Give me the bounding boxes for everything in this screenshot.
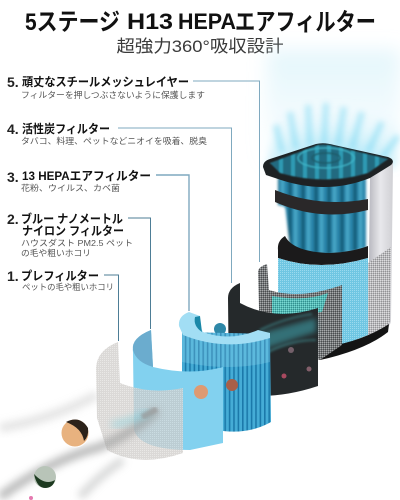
title: エアフィルター xyxy=(235,9,376,36)
label 4: activated carbon filter: タバコ、料理、ペットなどニオイを吸着、脱臭 xyxy=(21,136,208,146)
inner teal wall xyxy=(195,316,202,332)
label 1: pre-filter xyxy=(7,268,114,292)
steel mesh layer xyxy=(258,264,342,360)
leader line 1 xyxy=(104,275,118,341)
label 2: blue nano nylon filter: ハウスダスト PM2.5 ペット xyxy=(21,238,133,248)
title: HEPA xyxy=(178,9,236,34)
cap grille xyxy=(298,148,354,168)
label 3: H13 HEPA filter: 13 HEPAエアフィルター xyxy=(22,169,151,183)
particle: pink speck xyxy=(29,496,33,500)
top cap xyxy=(263,143,393,187)
label 4: activated carbon filter: 4. xyxy=(7,121,19,137)
label 1: pre-filter: ペットの毛や粗いホコリ xyxy=(22,282,114,292)
teal area behind mesh xyxy=(272,293,328,318)
label 5: steel mesh layer: 頑丈なスチールメッシュレイヤー xyxy=(22,75,189,89)
incoming dirty air streaks xyxy=(0,395,157,497)
label 5: steel mesh layer: 5. xyxy=(7,74,19,90)
particle: dark lower dust xyxy=(34,474,55,488)
particle: green dust ball xyxy=(34,466,56,488)
blue nano nylon filter xyxy=(133,330,223,450)
air purifier xyxy=(263,143,393,360)
leader line 5 xyxy=(193,81,260,262)
label 1: pre-filter: プレフィルター xyxy=(21,269,99,283)
leader line 2 xyxy=(128,218,150,329)
label 2: blue nano nylon filter xyxy=(7,211,133,258)
label 2: blue nano nylon filter: の毛や粗いホコリ xyxy=(21,248,91,258)
H13 HEPA filter xyxy=(179,312,271,432)
blue outer filter xyxy=(278,258,368,346)
shell lower mesh xyxy=(368,247,391,335)
small round filter icon xyxy=(214,323,226,335)
label 5: steel mesh layer: フィルターを押しつぶさないように保護します xyxy=(21,90,205,100)
subtitle: 超強力360°吸収設計 xyxy=(116,37,284,56)
label 3: H13 HEPA filter: 花粉、ウイルス、カベ菌 xyxy=(21,183,120,193)
label 2: blue nano nylon filter: ブルー ナノメートル xyxy=(21,211,123,226)
particle: orange pollen xyxy=(194,385,208,399)
label 3: H13 HEPA filter xyxy=(7,169,151,193)
pre-filter xyxy=(96,342,183,460)
leader line 4 xyxy=(118,128,232,283)
title: 5ステージ xyxy=(25,9,120,36)
dark ring xyxy=(275,190,368,214)
label 1: pre-filter: 1. xyxy=(7,268,19,284)
particle: pet hair ball xyxy=(61,419,89,447)
label 3: H13 HEPA filter: 3. xyxy=(7,169,19,185)
activated carbon filter xyxy=(228,283,318,396)
label 4: activated carbon filter xyxy=(7,121,208,146)
label 4: activated carbon filter: 活性炭フィルター xyxy=(22,121,110,136)
blue air glow above purifier xyxy=(262,50,400,170)
inner filter core lower xyxy=(285,205,366,255)
purifier shell xyxy=(368,163,393,337)
label 2: blue nano nylon filter: ナイロン フィルター xyxy=(22,224,124,238)
pollutant dots xyxy=(288,347,294,353)
title: H13 xyxy=(127,9,173,34)
particle: dark hair crescent xyxy=(66,420,88,441)
particle: pollen xyxy=(226,379,238,391)
filter top cap xyxy=(179,312,270,344)
label 5: steel mesh layer xyxy=(7,74,205,100)
inner filter core upper xyxy=(278,178,366,212)
leader line 3 xyxy=(156,175,189,311)
label 2: blue nano nylon filter: 2. xyxy=(7,211,19,227)
base shadow ring xyxy=(318,324,389,360)
lower collar xyxy=(278,236,368,265)
title xyxy=(25,9,376,36)
